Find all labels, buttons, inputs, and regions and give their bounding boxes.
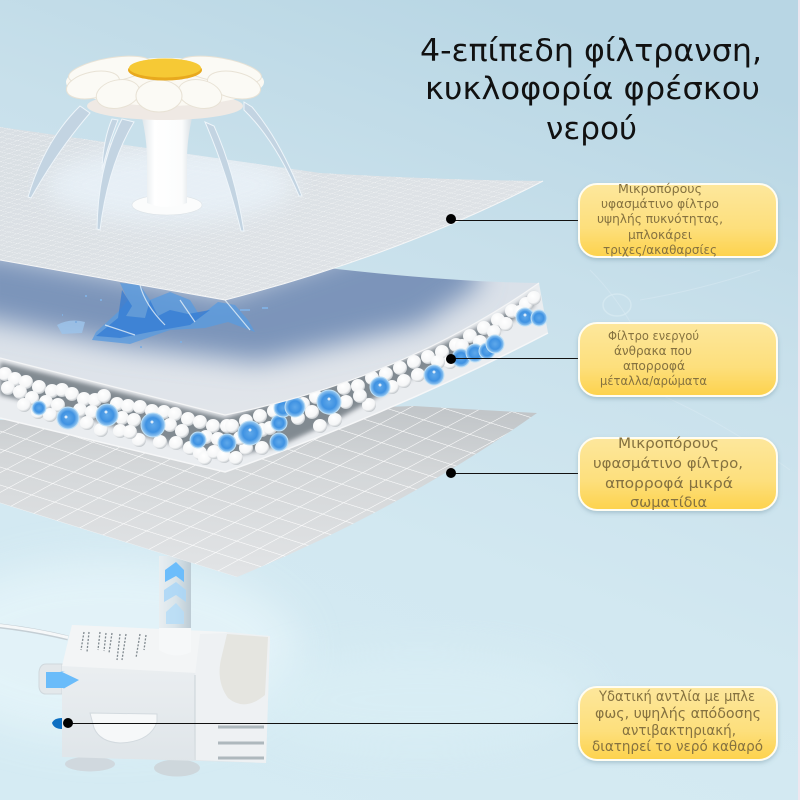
label text: Μικροπόρους <box>618 436 719 452</box>
leader line and dot <box>446 354 580 364</box>
callout: activated carbon <box>446 323 777 396</box>
water jets <box>28 102 302 231</box>
pump top face <box>62 625 227 673</box>
fountain stem <box>142 118 192 207</box>
label text <box>593 436 743 511</box>
label text: υφασμάτινο φίλτρο, <box>593 456 743 472</box>
callout: pump <box>63 687 777 760</box>
label box <box>579 687 777 760</box>
leader line and dot <box>63 718 580 728</box>
submersible pump <box>0 625 270 776</box>
label text: τριχες/ακαθαρσίες <box>603 242 717 257</box>
pooled water on sheet <box>45 147 295 223</box>
label text: απορροφά <box>623 358 685 373</box>
pump body <box>62 625 270 763</box>
label text: Μικροπόρους <box>618 181 702 196</box>
layer 4: lower micro-porous mesh filter <box>0 406 537 577</box>
dark gaps behind beads <box>0 292 535 458</box>
label text: Φίλτρο ενεργού <box>608 328 699 343</box>
label box <box>579 438 777 510</box>
flower petals <box>64 51 263 112</box>
layer 1: top fine micro-porous filter <box>0 127 543 300</box>
label text: αντιβακτηριακή, <box>622 723 736 739</box>
label text: υφασμάτινο φίλτρο <box>601 196 719 211</box>
power cord <box>0 626 68 638</box>
label text: φως, υψηλής απόδοσης <box>595 706 761 722</box>
layer 2: activated carbon upper sheet <box>0 260 540 416</box>
title: 4-επίπεδη φίλτρανση, <box>420 33 762 69</box>
icon: outlet arrow <box>46 671 79 689</box>
leader line and dot <box>446 468 580 478</box>
callout: top filter <box>446 181 777 257</box>
title: κυκλοφορία φρέσκου <box>425 71 760 107</box>
layer 3: activated carbon filter beads <box>0 291 547 465</box>
blue active carbon beads <box>32 308 547 452</box>
leader line and dot <box>446 214 580 224</box>
layer 3: carrier sheet for filter media <box>0 283 548 472</box>
label text: μέταλλα/αρώματα <box>600 373 707 388</box>
label text: διατηρεί το νερό καθαρό <box>592 739 763 755</box>
icon: flow arrow 2 <box>164 582 186 602</box>
label box <box>579 184 777 257</box>
label text: άνθρακα που <box>614 343 692 358</box>
callout: lower mesh filter <box>446 436 777 511</box>
printed specification marks <box>81 632 146 660</box>
title: νερού <box>546 111 637 147</box>
pump feet <box>65 756 200 776</box>
water splash <box>57 283 268 347</box>
pump outlet <box>39 664 62 694</box>
white beads <box>0 291 541 465</box>
label box <box>579 323 777 396</box>
icon: flow arrow 1 <box>165 562 184 582</box>
daisy fountain head <box>28 51 302 231</box>
icon: flow arrow 3 <box>166 603 184 624</box>
flower yellow centre <box>128 58 202 80</box>
label text: Υδατική αντλία με μπλε <box>598 689 755 705</box>
label text <box>592 689 763 755</box>
bead highlights <box>64 314 526 432</box>
label text: απορροφά μικρά <box>605 476 733 492</box>
pump tube with upward flow arrows <box>159 556 191 632</box>
tube collar <box>159 628 191 656</box>
flower silhouette <box>66 58 264 106</box>
label text: μπλοκάρει <box>628 227 692 242</box>
foam filter <box>220 634 268 704</box>
label text: υψηλής πυκνότητας, <box>597 211 723 226</box>
fountain base ring <box>132 195 202 215</box>
label text: σωματίδια <box>630 495 707 511</box>
vent slots <box>218 727 264 758</box>
title <box>420 33 762 147</box>
blue light marker <box>52 718 62 729</box>
label text <box>597 181 723 257</box>
pump right section <box>194 633 270 763</box>
shadow cast by top sheet <box>0 260 494 378</box>
side clip <box>90 713 157 743</box>
flower underside disc <box>87 92 243 120</box>
label text <box>600 328 707 388</box>
